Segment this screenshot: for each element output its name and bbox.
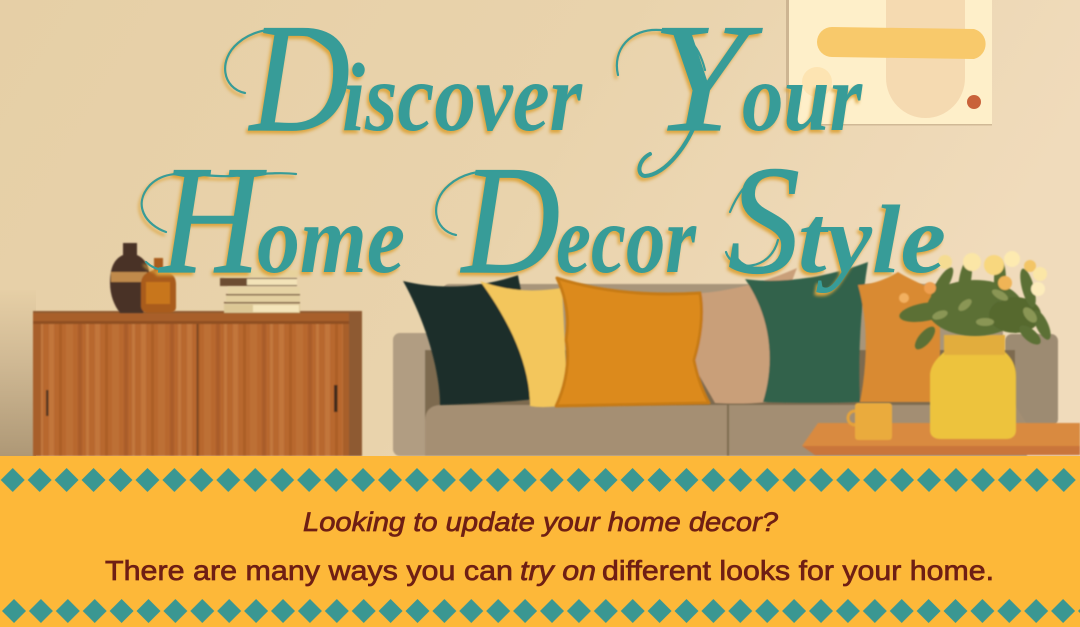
title word: Your: our xyxy=(742,44,863,152)
subtitle statement: There are many ways you can xyxy=(105,555,513,586)
title word: Home: H xyxy=(158,134,266,306)
title word: Style: S xyxy=(728,134,800,306)
yellow vase xyxy=(930,335,1016,439)
title word: Discover: iscover xyxy=(342,44,583,152)
title word: Style: tyle xyxy=(798,186,946,294)
flower bouquet xyxy=(898,251,1054,353)
diamond border top xyxy=(0,468,1078,493)
wall shadow beside cabinet xyxy=(0,290,36,456)
sofa pillows xyxy=(403,262,940,407)
diamond border bottom xyxy=(0,599,1080,624)
mug xyxy=(848,403,892,440)
coffee table xyxy=(802,423,1080,455)
subtitle statement xyxy=(105,555,994,586)
stack of books xyxy=(220,270,300,313)
title word: Decor: D xyxy=(460,134,560,306)
title xyxy=(142,0,946,306)
subtitle statement: different looks for your home. xyxy=(602,555,994,586)
title word: Home: ome xyxy=(257,186,405,294)
vases on cabinet xyxy=(110,243,176,313)
title flourishes xyxy=(142,29,792,269)
wooden cabinet xyxy=(33,311,362,456)
orange footer band xyxy=(0,456,1080,627)
subtitle statement: try on xyxy=(520,555,596,586)
wall background xyxy=(0,0,1080,456)
wall art painting xyxy=(786,0,992,126)
subtitle question: Looking to update your home decor? xyxy=(303,507,778,537)
title word: Decor: ecor xyxy=(556,186,697,294)
sofa xyxy=(393,284,1058,456)
